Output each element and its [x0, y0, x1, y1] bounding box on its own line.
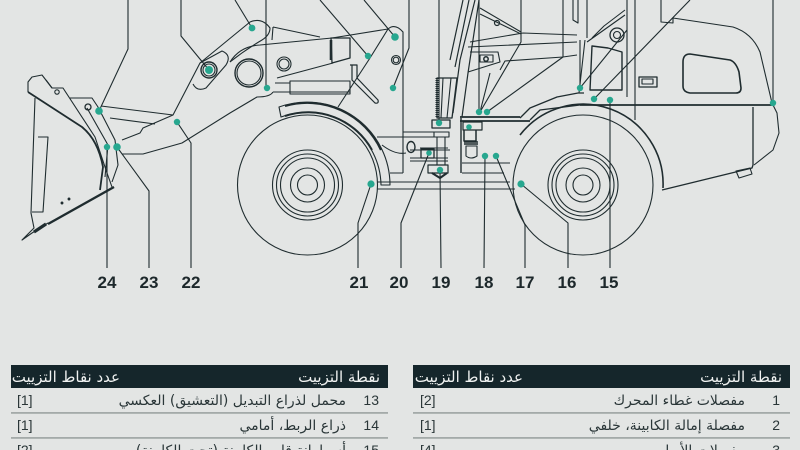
table: points 13 to 15: محمل لذراع التبديل (التعشيق) العكسي — [119, 393, 346, 409]
callout numbers: 15 — [600, 273, 618, 292]
bucket — [22, 75, 118, 240]
table: points 13 to 15: عدد نقاط التزييت — [12, 368, 120, 386]
table: points 1 to 3: مفصلات غطاء المحرك — [614, 393, 745, 409]
table: points 13 to 15: 14 — [363, 417, 379, 433]
callout numbers: 23 — [140, 273, 158, 292]
wheel loader line drawing — [22, 0, 779, 268]
table: points 1 to 3: 2 — [772, 417, 780, 433]
table: points 13 to 15 — [11, 365, 388, 450]
table: points 13 to 15: 13 — [363, 392, 379, 408]
central joint and lower frame — [377, 117, 530, 189]
lubrication point markers — [95, 25, 776, 188]
table: points 13 to 15: [1] — [17, 392, 33, 408]
table: points 1 to 3: 1 — [772, 392, 780, 408]
table: points 1 to 3: نقطة التزييت — [700, 368, 782, 386]
table: points 1 to 3: عدد نقاط التزييت — [415, 368, 523, 386]
engine hood and rear body — [580, 0, 779, 190]
leader lines — [99, 0, 773, 268]
callout numbers: 21 — [350, 273, 368, 292]
callout numbers: 17 — [516, 273, 534, 292]
front wheel and fender — [238, 102, 390, 255]
callout numbers: 24 — [98, 273, 117, 292]
callout numbers: 18 — [475, 273, 493, 292]
cab door and pillars — [437, 0, 625, 118]
table: points 1 to 3: [1] — [420, 417, 436, 433]
callout numbers — [98, 273, 618, 292]
callout numbers: 16 — [558, 273, 576, 292]
table: points 13 to 15: نقطة التزييت — [298, 368, 380, 386]
callout numbers: 19 — [432, 273, 450, 292]
rear wheel and fender — [513, 93, 663, 255]
table: points 1 to 3: مفصلة إمالة الكابينة، خلفي — [589, 418, 745, 434]
table: points 13 to 15: [1] — [17, 417, 33, 433]
table: points 1 to 3: [2] — [420, 392, 436, 408]
table: points 13 to 15: ذراع الربط، أمامي — [239, 416, 346, 434]
lift arm and frame — [101, 20, 415, 173]
callout numbers: 22 — [182, 273, 200, 292]
table: points 1 to 3 — [413, 365, 790, 450]
callout numbers: 20 — [390, 273, 408, 292]
